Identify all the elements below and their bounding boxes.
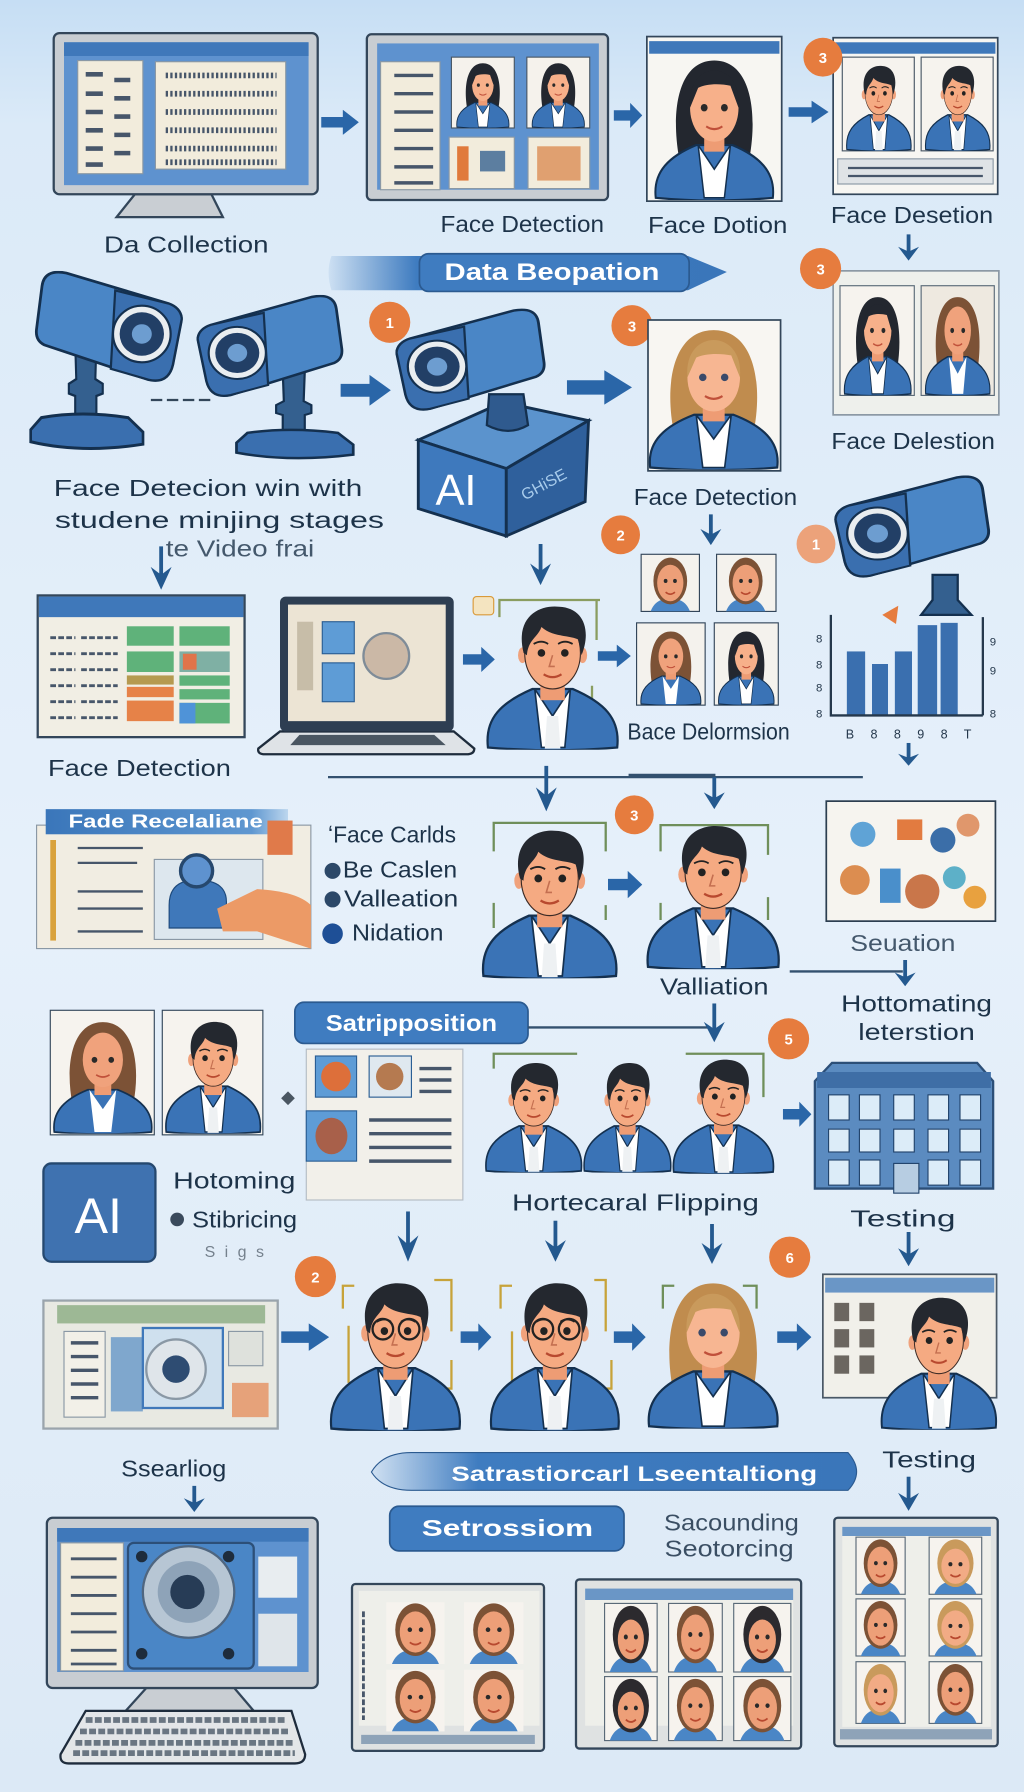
arrow [614,103,642,128]
label: horizontal flipping: Hortecaral Flipping [512,1189,759,1215]
connector line [528,1026,709,1028]
portrait: boy framed [331,1280,460,1431]
label: face detection: Face Detection [634,484,797,510]
list: steps: Nidation [352,920,443,946]
panel: 2x2 face grid [352,1584,544,1751]
arrow [898,1477,919,1511]
chart: bars: 9 [990,665,996,677]
badge [800,248,841,289]
portrait: boy framed [483,823,616,979]
label: testing: Testing [882,1446,976,1472]
label: data collection: Da Collection [104,232,269,258]
arrow [700,514,721,545]
icon: AI camera box [397,310,589,536]
arrow [702,1224,722,1264]
dot [281,1091,295,1105]
list: steps: Be Caslen [343,857,457,883]
arrow [608,871,642,898]
panel: data table [38,595,245,737]
badge [769,1237,810,1278]
icon: camera 2 [198,296,353,458]
pill: superposition [295,1002,528,1043]
panel: face recognition [37,809,311,949]
chart: bars: 8 [816,709,822,721]
list: steps: Valleation [344,885,458,911]
icon: camera 1 [31,272,182,448]
arrow [789,101,829,123]
panel: face recognition: Fade Recelaliane [69,810,263,831]
arrow [898,1232,919,1266]
arrow [341,375,391,406]
label: face detection: Face Detection [48,755,231,781]
badge [601,515,640,554]
arrow [567,370,632,405]
arrow [777,1323,811,1351]
badge: 3 [630,809,638,825]
portrait: boy framed [491,1280,619,1431]
label: face detection: Face Delestion [831,428,995,454]
panel: photo browser [367,34,608,200]
connector lines [328,775,863,789]
pill: submission [390,1506,624,1551]
chart: bars [816,606,996,741]
panel: two portraits [50,1010,263,1135]
panel: portrait [647,37,782,201]
arrow [614,1323,646,1351]
panel: two portraits [833,271,999,415]
arrow [598,645,631,667]
banner: submission and selection [371,1453,857,1490]
portrait: boy framed [648,825,779,970]
panel: 3x2 face grid [576,1579,801,1749]
text block: caption: studene minjing stages [55,507,384,533]
badge: 3 [628,319,636,335]
icon: AI camera box: GHiSE [519,466,570,504]
badge [295,1256,336,1297]
text block: horizontal testing: leterstion [858,1019,975,1045]
badge [803,38,842,77]
text block: caption [54,475,384,562]
arrow [704,1003,725,1042]
badge [768,1018,809,1059]
panel: camera software [43,1301,278,1429]
badge: 1 [812,538,820,554]
text block: horizontal testing [841,990,992,1045]
panel: evaluation collage [826,801,995,921]
arrow [895,960,916,986]
portraits: flipped boys [486,1054,773,1174]
label: face detection: Face Detection [441,211,604,237]
panel: blonde portrait [648,320,781,471]
chart: bars: 8 [990,709,996,721]
text block: caption: te Video frai [166,536,314,562]
panel: data collection monitor [54,33,318,217]
badge: 3 [816,262,825,278]
panel: small portraits [637,554,778,705]
badge [615,795,654,834]
connector [151,399,215,401]
panel: testing software [823,1274,997,1430]
text block: horizoning: Stibricing [192,1206,297,1232]
label: face detection: Face Dotion [648,212,787,238]
arrow [783,1102,811,1127]
badge: 5 [784,1033,793,1049]
list: steps: ʻFace Carlds [328,821,456,847]
text block: caption: Face Detecion win with [54,475,362,501]
arrow [704,777,725,809]
panel: 2x3 face grid [834,1518,998,1746]
icon: building [815,1063,993,1193]
portrait: boy [473,597,618,750]
panel: document [306,1049,463,1200]
label: base deformation: Bace Delormsion [627,718,790,744]
chart: bars: 9 [990,637,996,649]
arrow [463,647,495,672]
arrow [898,234,919,261]
badge [369,302,410,343]
text block: scoring: Seotorcing [665,1536,794,1562]
icon: camera 4 [835,477,989,615]
arrow [545,1221,566,1262]
badge [797,525,835,563]
icon: laptop [258,597,474,754]
arrow [184,1486,205,1512]
text block: horizontal testing: Hottomating [841,990,992,1016]
panel: two portraits [833,38,998,194]
chart: bars: 8 [816,682,822,694]
pill: submission: Setrossiom [422,1515,593,1541]
banner: submission and selection: Satrastiorcarl Lseentaltiong [451,1461,817,1486]
arrow [151,546,172,590]
label: evaluation: Seuation [850,930,955,956]
arrow [461,1323,491,1351]
banner: data deception: Data Beopation [445,259,659,286]
icon: AI [43,1163,155,1262]
text block: horizoning: Hotoming [173,1168,295,1194]
connector line [790,970,903,972]
banner: data deception [329,254,727,291]
badge: 3 [819,51,827,67]
arrow [898,743,919,766]
badge: 2 [311,1270,320,1286]
text block: horizoning: Sigs [205,1244,264,1261]
text block: horizoning [170,1168,297,1261]
badge: 2 [616,529,625,545]
chart: bars: 8 [816,633,822,645]
arrow [530,544,551,585]
list: steps [322,821,458,946]
chart: bars: 8 [816,660,822,672]
text block: scoring [664,1509,799,1562]
arrow [536,766,557,811]
label: testing: Testing [850,1205,955,1231]
arrow [281,1323,329,1351]
arrow [398,1211,418,1262]
label: scanning: Ssearliog [121,1456,226,1482]
text block: scoring: Sacounding [664,1509,799,1535]
badge: 6 [786,1251,794,1267]
badge: 1 [386,316,394,332]
badge [611,305,653,346]
icon: AI camera box: AI [435,467,477,515]
label: face detection: Face Desetion [831,202,993,228]
chart: bars: B 8 8 9 8 T [846,727,972,741]
pill: superposition: Satripposition [326,1010,497,1036]
label: validation: Valliation [660,973,769,999]
arrow [321,110,359,135]
portrait: blonde framed [649,1283,778,1429]
icon: desktop computer [47,1518,318,1763]
icon: AI: AI [75,1187,122,1244]
